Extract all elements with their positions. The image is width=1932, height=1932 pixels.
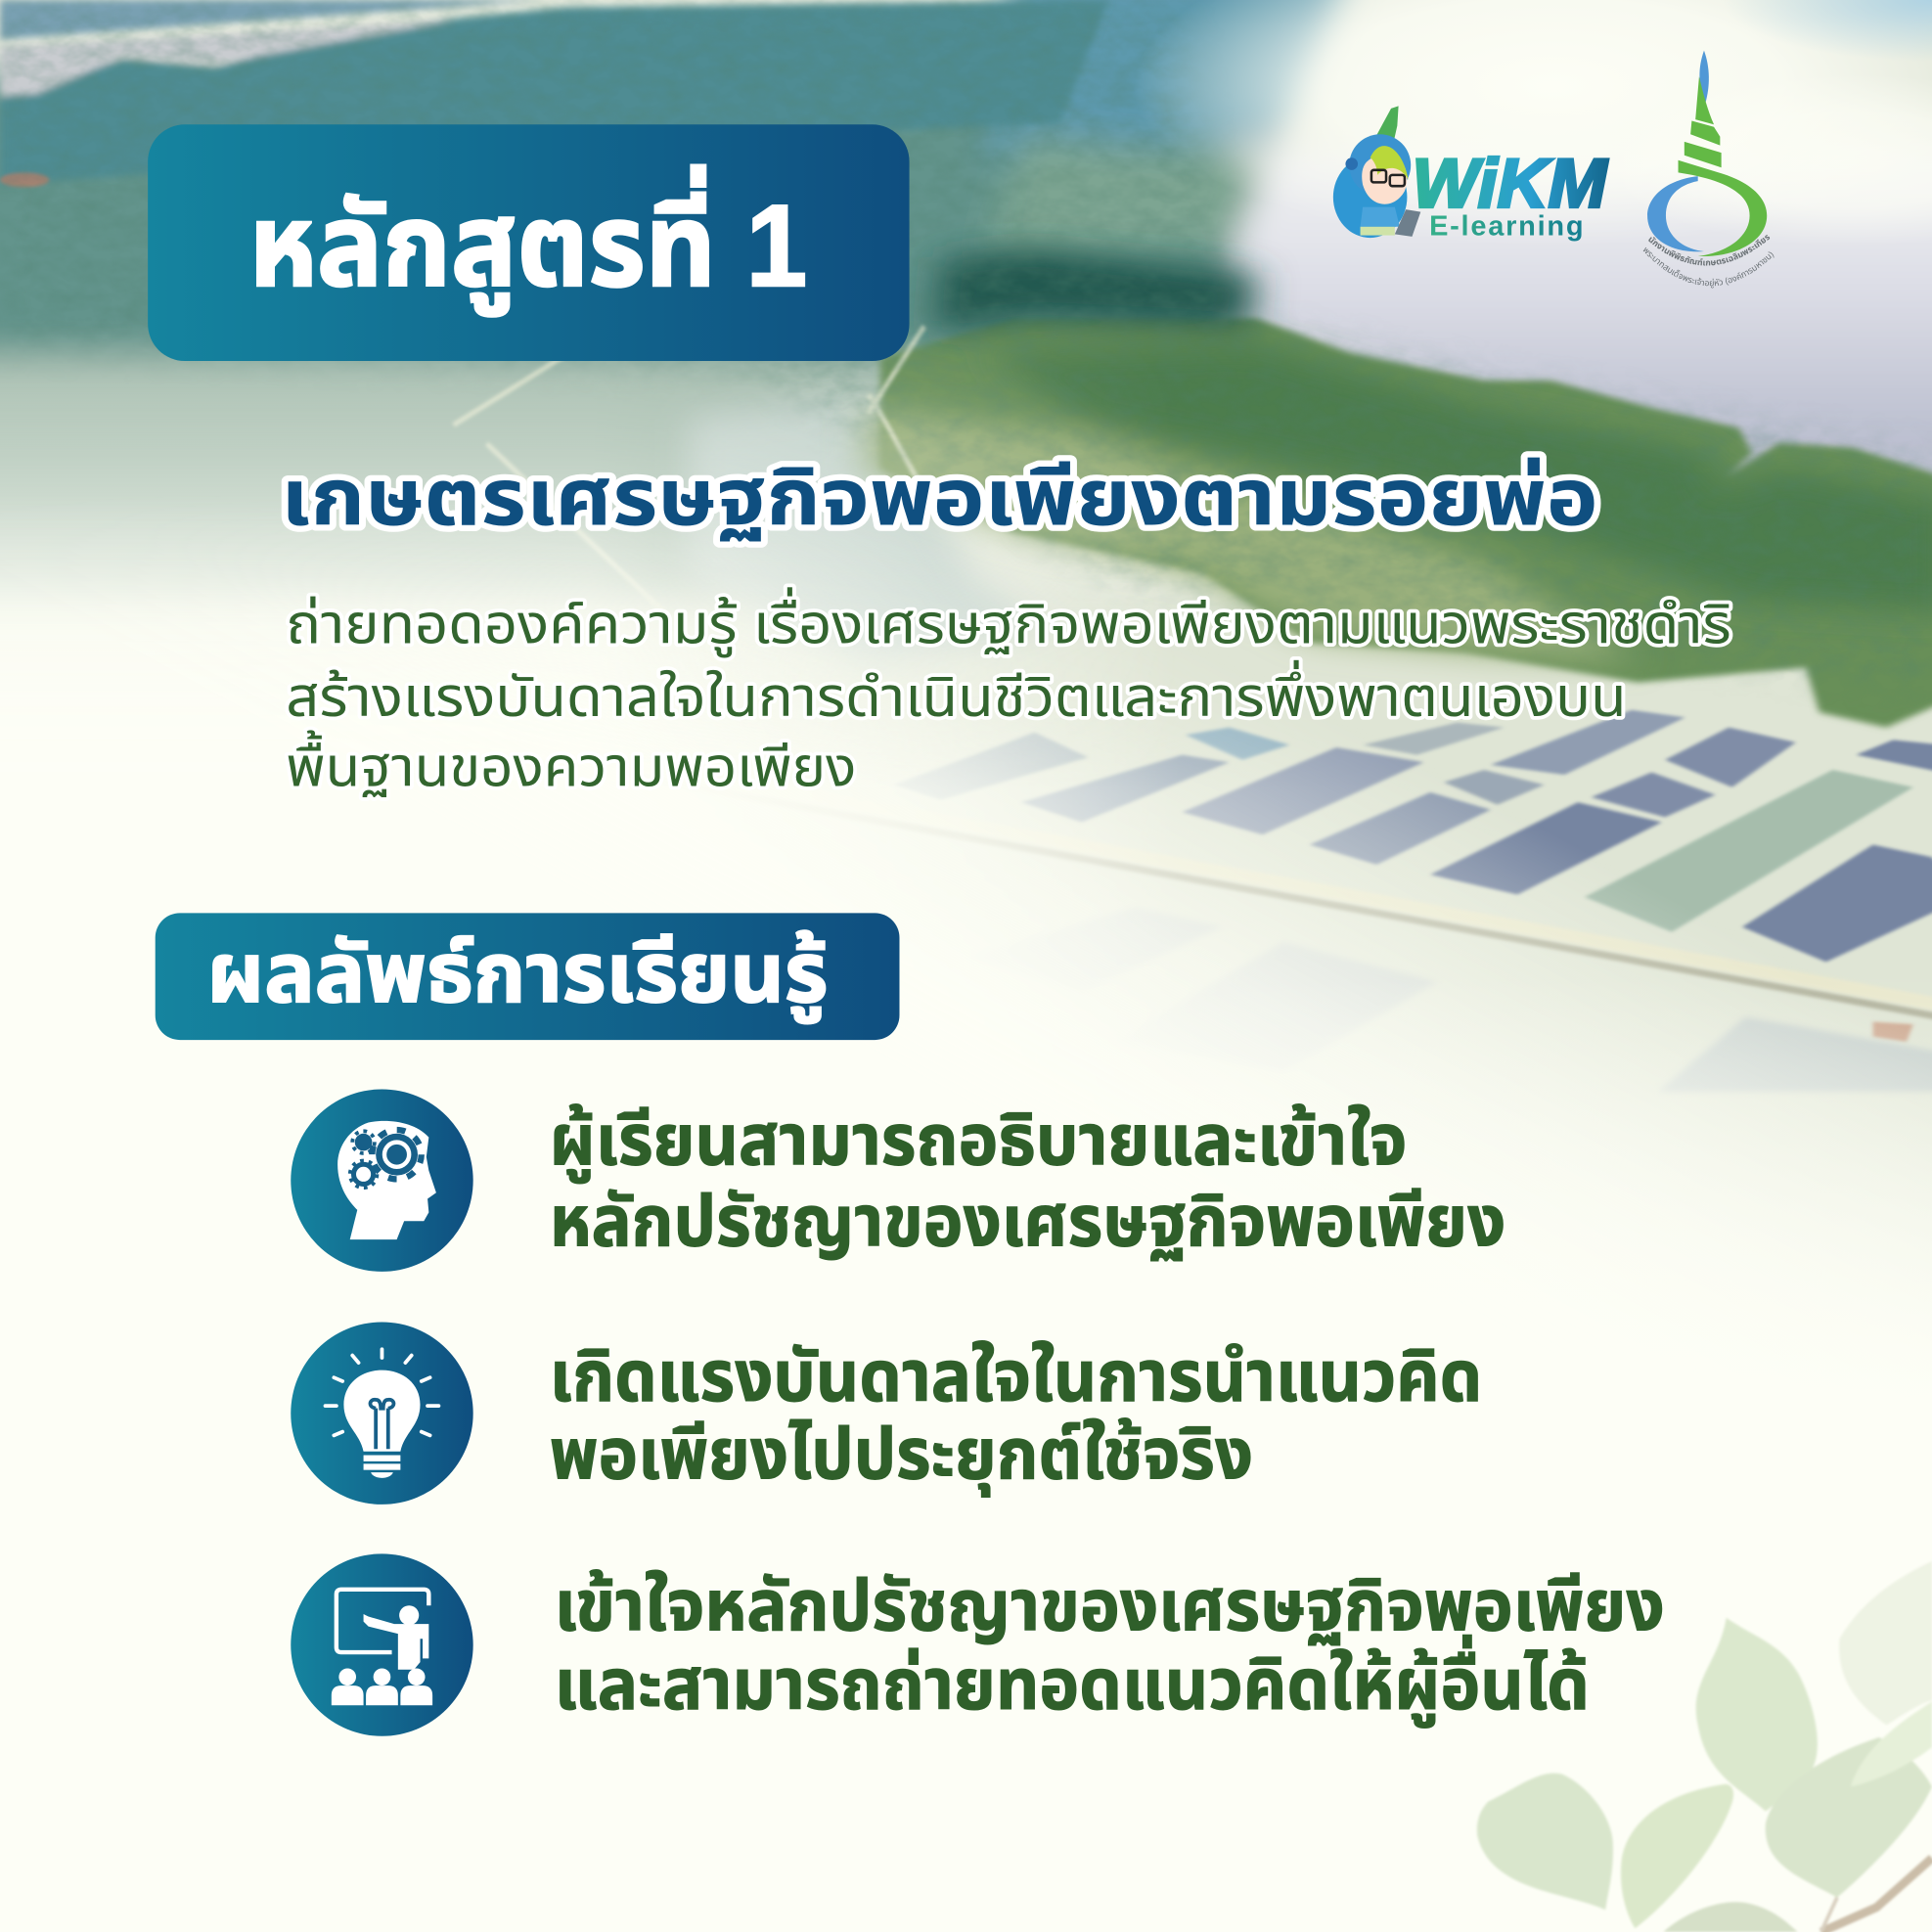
outcome 3 text: และสามารถถ่ายทอดแนวคิดให้ผู้อื่นได้ (555, 1635, 1590, 1728)
royal agency logo: พระบาทสมเด็จพระเจ้าอยู่หัว (องค์การมหาชน) (1643, 247, 1775, 288)
title text: หลักสูตรที่ 1 (248, 165, 807, 317)
description paragraph: พื้นฐานของความพอเพียง (286, 730, 856, 799)
description paragraph (286, 586, 1731, 799)
outcome 1 text: หลักปรัชญาของเศรษฐกิจพอเพียง (550, 1182, 1505, 1261)
outcome 2 text (550, 1337, 1482, 1497)
rooftop (0, 172, 49, 187)
outcome 1 text: ผู้เรียนสามารถอธิบายและเข้าใจ (550, 1101, 1407, 1183)
outcome 2 text: พอเพียงไปประยุกต์ใช้จริง (550, 1415, 1253, 1497)
royal agency logo (1643, 51, 1775, 288)
title banner (148, 124, 910, 361)
background photo: aerial view of mangrove and shrimp ponds (0, 0, 1932, 1229)
outcome 1 text (550, 1101, 1505, 1261)
description paragraph: ถ่ายทอดองค์ความรู้ เรื่องเศรษฐกิจพอเพียงตามแนวพระราชดำริ (286, 586, 1731, 657)
E-learning wordmark: E-learning (1429, 211, 1584, 243)
outcome 2 text: เกิดแรงบันดาลใจในการนำแนวคิด (550, 1337, 1482, 1416)
WKM wordmark: WiKM (1412, 145, 1608, 222)
WiKM E-learning logo (1333, 106, 1608, 243)
outcome 1 icon: head with gears (291, 1089, 473, 1272)
subtitle: เกษตรเศรษฐกิจพอเพียงตามรอยพ่อ (281, 455, 1598, 543)
outcome 2 icon: light bulb (291, 1323, 473, 1505)
description paragraph: สร้างแรงบันดาลใจในการดำเนินชีวิตและการพึ่งพาตนเองบน (286, 659, 1627, 729)
decorative leaves, bottom right (1477, 1561, 1932, 1932)
outcome 3 text (555, 1566, 1665, 1728)
learning outcomes heading banner (156, 913, 899, 1040)
outcome 3 icon: teacher and students (291, 1553, 473, 1736)
learning outcomes heading text: ผลลัพธ์การเรียนรู้ (207, 926, 828, 1024)
outcome 3 text: เข้าใจหลักปรัชญาของเศรษฐกิจพอเพียง (555, 1566, 1665, 1645)
